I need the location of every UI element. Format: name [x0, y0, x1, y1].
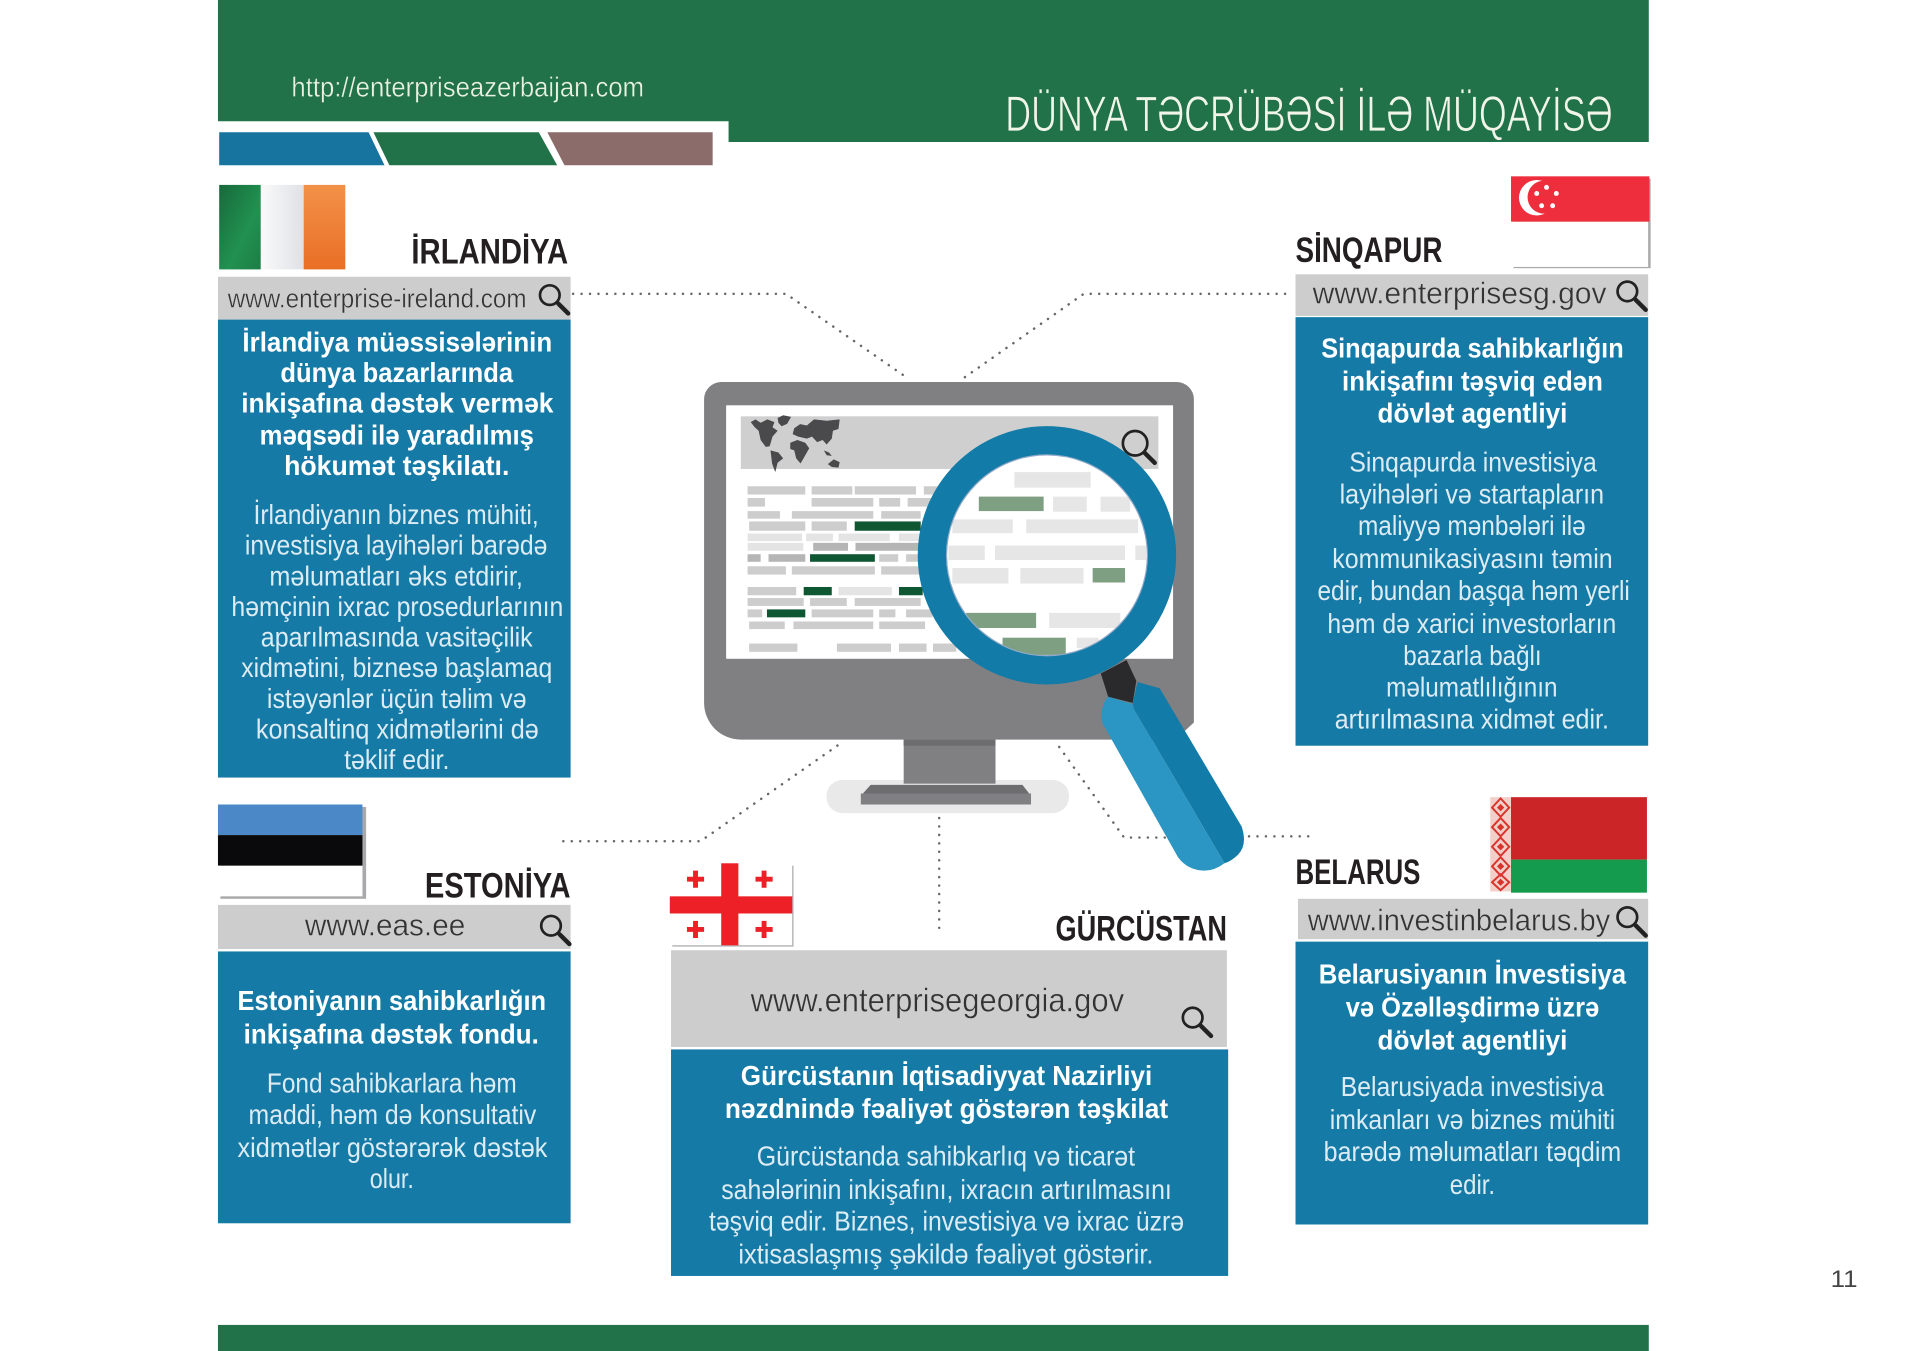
screen search icon: [1123, 431, 1155, 463]
box body text: edir, bundan başqa həm yerli: [1318, 575, 1630, 606]
box heading: inkişafına dəstək vermək: [241, 388, 554, 419]
box body text: investisiya layihələri barədə: [245, 530, 547, 561]
panel: Belarus: [1296, 797, 1648, 1225]
country name: İRLANDİYA: [411, 231, 568, 271]
box heading: [725, 1060, 1169, 1124]
flag: Ireland: [219, 185, 345, 269]
box heading: Belarusiyanın İnvestisiya: [1319, 958, 1626, 989]
box body text: məlumatlılığının: [1386, 672, 1558, 703]
box heading: məqsədi ilə yaradılmış: [260, 419, 534, 450]
box body text: İrlandiyanın biznes mühiti,: [253, 499, 539, 530]
box body text: məlumatları əks etdirir,: [269, 560, 523, 591]
box body text: [231, 499, 563, 775]
box body text: həm də xarici investorların: [1327, 608, 1616, 639]
box heading: dövlət agentliyi: [1378, 1024, 1567, 1055]
lens inner edge: [945, 454, 1149, 657]
world map: [751, 415, 840, 472]
search bar: [671, 950, 1227, 1047]
box body text: konsaltinq xidmətlərini də: [256, 713, 539, 744]
search bar: [218, 905, 571, 949]
country name: GÜRCÜSTAN: [1056, 908, 1227, 948]
monitor body: [704, 382, 1194, 740]
box heading: İrlandiya müəssisələrinin: [242, 326, 552, 357]
handle light side: [1101, 697, 1224, 871]
box heading: [1321, 333, 1624, 428]
box body text: ixtisaslaşmış şəkildə fəaliyət göstərir.: [738, 1239, 1153, 1270]
box heading: dövlət agentliyi: [1378, 397, 1567, 428]
box body text: maddi, həm də konsultativ: [249, 1099, 536, 1130]
central illustration: monitor and magnifier: [704, 382, 1244, 871]
handle collar: [1101, 660, 1136, 703]
screen search bar: [741, 416, 1158, 469]
search bar: www.enterprisegeorgia.gov: [750, 982, 1125, 1019]
header band: [218, 0, 1649, 142]
search bar: www.investinbelarus.by: [1307, 904, 1611, 938]
box body text: artırılmasına xidmət edir.: [1335, 704, 1609, 735]
search bar: [218, 277, 571, 320]
box heading: [241, 326, 554, 481]
description box: [1296, 317, 1648, 746]
box body text: maliyyə mənbələri ilə: [1358, 510, 1586, 541]
flag: Singapore: [1511, 176, 1651, 268]
box heading: [238, 985, 546, 1049]
box body text: istəyənlər üçün təlim və: [267, 683, 527, 714]
monitor stand: [827, 740, 1069, 813]
search bar: www.enterprise-ireland.com: [227, 283, 527, 313]
box heading: dünya bazarlarında: [280, 357, 513, 388]
box body text: layihələri və startapların: [1340, 478, 1604, 509]
box body text: olur.: [370, 1163, 414, 1194]
box body text: imkanları və biznes mühiti: [1330, 1104, 1615, 1135]
box body text: [238, 1067, 548, 1194]
box body text: sahələrinin inkişafını, ixracın artırılmasını: [721, 1174, 1172, 1205]
dotted connector lines: [563, 294, 1316, 931]
search bar: [1296, 274, 1648, 316]
box heading: inkişafına dəstək fondu.: [244, 1018, 539, 1049]
flag: Estonia: [218, 805, 366, 899]
box heading: Sinqapurda sahibkarlığın: [1321, 333, 1624, 364]
country name: SİNQAPUR: [1296, 230, 1442, 270]
lens ring: [932, 440, 1162, 670]
website address: http://enterpriseazerbaijan.com: [291, 72, 644, 103]
box body text: Gürcüstanda sahibkarlıq və ticarət: [757, 1141, 1135, 1172]
box body text: [1324, 1071, 1621, 1200]
box body text: aparılmasında vasitəçilik: [261, 622, 533, 653]
page title: DÜNYA TƏCRÜBƏSİ İLƏ MÜQAYİSƏ: [1005, 86, 1613, 142]
description box: [671, 1049, 1228, 1276]
country name: ESTONİYA: [425, 866, 571, 906]
box body text: xidmətlər göstərərək dəstək: [238, 1132, 548, 1163]
box body text: həmçinin ixrac prosedurlarının: [231, 591, 563, 622]
description box: [218, 951, 571, 1223]
flag: Belarus: [1490, 797, 1647, 893]
screen text bars: [748, 486, 986, 652]
box heading: Gürcüstanın İqtisadiyyat Nazirliyi: [741, 1060, 1152, 1091]
box body text: edir.: [1450, 1169, 1495, 1200]
country name: BELARUS: [1296, 852, 1420, 892]
search bar: www.enterprisesg.gov: [1312, 277, 1607, 311]
description box: [218, 320, 571, 778]
box body text: Belarusiyada investisiya: [1341, 1071, 1604, 1102]
footer band: [218, 1325, 1649, 1351]
tricolour header strips: [219, 132, 713, 165]
box body text: [709, 1141, 1184, 1270]
box heading: hökumət təşkilatı.: [284, 450, 509, 481]
box heading: Estoniyanın sahibkarlığın: [238, 985, 546, 1016]
lens interior: [945, 454, 1149, 657]
panel: Ireland: [218, 185, 571, 778]
box body text: Sinqapurda investisiya: [1349, 446, 1597, 477]
box body text: təşviq edir. Biznes, investisiya və ixrac üzrə: [709, 1206, 1184, 1237]
box heading: [1319, 958, 1626, 1055]
monitor screen: [726, 405, 1173, 659]
box body text: bazarla bağlı: [1403, 640, 1542, 671]
magnified bars: [948, 472, 1146, 655]
box heading: nəzdnində fəaliyət göstərən təşkilat: [725, 1093, 1169, 1124]
search bar: www.eas.ee: [304, 909, 465, 943]
box heading: inkişafını təşviq edən: [1342, 366, 1603, 397]
magnifying glass: [932, 440, 1244, 871]
box body text: xidmətini, biznesə başlamaq: [241, 652, 552, 683]
box body text: [1318, 446, 1630, 735]
box body text: barədə məlumatları təqdim: [1324, 1136, 1621, 1167]
page number: 11: [1831, 1266, 1858, 1293]
handle dark side: [1133, 682, 1244, 863]
box heading: və Özəlləşdirmə üzrə: [1346, 991, 1599, 1022]
panel: Georgia: [670, 863, 1228, 1276]
flag: Georgia: [670, 863, 793, 947]
description box: [1296, 942, 1648, 1225]
panel: Estonia: [218, 805, 571, 1223]
box body text: təklif edir.: [344, 744, 449, 775]
box body text: kommunikasiyasını təmin: [1332, 543, 1613, 574]
box body text: Fond sahibkarlara həm: [267, 1067, 517, 1098]
panel: Singapore: [1296, 176, 1651, 746]
